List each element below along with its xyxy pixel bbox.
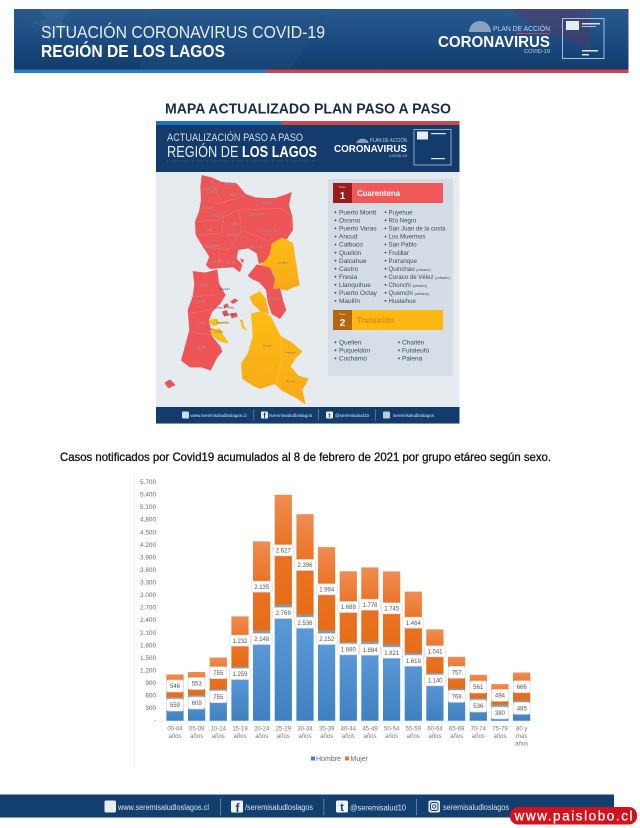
x axis labels: 80 y (516, 726, 527, 732)
commune labels: Frutillar (231, 222, 240, 226)
commune labels: la Costa (207, 189, 217, 193)
y axis labels: 3.300 (140, 580, 156, 586)
link: instagram: seremisaludloslagos (443, 803, 509, 812)
commune labels: Puqueldón (216, 320, 229, 324)
commune labels: San Juan de (204, 186, 220, 190)
x axis labels: 30-34 (297, 726, 313, 732)
commune labels: Castro (197, 321, 205, 325)
bar: 65-69 (448, 657, 465, 721)
x axis labels: años (407, 734, 420, 740)
link: website (104, 800, 209, 812)
y axis labels: 600 (145, 693, 156, 700)
list: communes in quarantine, left column (335, 210, 378, 305)
panel footer: social links: t (328, 412, 331, 420)
bar: 75-79 (491, 684, 508, 721)
commune labels: Quinchao (223, 312, 235, 316)
commune labels: Puerto Varas (262, 228, 278, 232)
x axis labels: 15-19 (232, 726, 248, 732)
commune labels: Chaitén (263, 344, 272, 348)
commune labels: Osorno (230, 192, 239, 196)
bar: 65-69: 757 (452, 670, 462, 676)
x axis labels: más (516, 734, 527, 740)
x axis labels: años (472, 734, 485, 740)
list: communes in transition: Cochamó (339, 356, 367, 363)
x axis labels: años (212, 734, 225, 740)
list: communes in quarantine, left column: Llanquihue (339, 282, 371, 289)
commune labels: Llanquihue (227, 232, 240, 236)
list: communes in quarantine, left column: Puerto Octay (339, 290, 378, 297)
heading: mapa actualizado: MAPA ACTUALIZADO PLAN PASO A PASO (165, 100, 451, 118)
y axis labels: 4.200 (140, 542, 156, 549)
y axis labels: 4.500 (140, 529, 156, 536)
bar: 80 y mas (513, 672, 530, 721)
x axis labels: años (190, 734, 203, 740)
x axis labels: años (255, 734, 268, 740)
step 1 badge: cuarentena: Paso (339, 185, 346, 189)
x axis labels (167, 726, 528, 748)
bar: 05-09: 609 (192, 701, 202, 707)
Hualaihue zone in quarantine (248, 264, 286, 319)
list: communes in transition: Chaitén (402, 340, 425, 346)
bar: 20-24 (251, 541, 272, 721)
x axis labels: 35-39 (319, 726, 335, 732)
north zone in quarantine (195, 175, 293, 272)
commune labels: Dalcahue (194, 299, 206, 303)
link: facebook: /seremisaludloslagos (245, 803, 313, 812)
list: communes in quarantine, right column: San Juan de la costa (388, 226, 446, 233)
list: communes in quarantine, left column: Maullín (339, 298, 360, 305)
link: twitter handle (336, 800, 407, 814)
icon: ministry emblem (562, 18, 604, 58)
panel footer: social links: f (263, 413, 266, 420)
bar: 70-74: 536 (473, 704, 484, 710)
bar: 75-79: 380 (495, 711, 506, 717)
list: communes in quarantine, left column: Calbuco (339, 242, 363, 249)
commune labels: Quemchi (219, 287, 230, 291)
commune labels: Palena (287, 380, 295, 384)
y axis labels: 2.100 (140, 630, 156, 637)
commune labels: Purranque (211, 214, 224, 218)
link: instagram (428, 800, 509, 812)
x axis labels: 70-74 (471, 726, 487, 732)
map of Los Lagos region (164, 175, 309, 404)
panel footer: social links (156, 407, 460, 424)
x axis labels: 60-64 (427, 726, 443, 732)
list: communes in quarantine, right column (385, 210, 450, 305)
bar: 70-74: 561 (473, 685, 484, 691)
bar: 00-04: 546 (170, 684, 181, 690)
commune labels: Fresia (206, 228, 214, 232)
bar: 00-04: 559 (170, 703, 181, 709)
header title (41, 21, 325, 61)
x axis labels: años (515, 742, 528, 748)
bar: 45-49: 1.778 (362, 603, 378, 609)
header title: SITUACIÓN CORONAVIRUS COVID-19 (41, 21, 325, 42)
list: communes in quarantine, right column: Hualaihue (388, 298, 417, 305)
bar: 10-14: 755 (213, 671, 224, 677)
header logo: plan de accion coronavirus: COVID-19 (524, 49, 550, 55)
y axis labels: 5.700 (140, 479, 156, 486)
header logo: plan de accion coronavirus (438, 21, 550, 55)
list: communes in transition: Puqueldón (339, 348, 370, 354)
commune labels: Quellón (196, 345, 206, 349)
x axis labels: años (363, 734, 377, 740)
y axis labels: 3.000 (140, 592, 156, 599)
bar: 15-19: 1.259 (232, 672, 248, 678)
bar: 60-64: 1.041 (427, 650, 443, 656)
bar: 15-19: 1.232 (232, 639, 248, 645)
list: communes in quarantine, left column: Dalcahue (339, 258, 367, 265)
legend (311, 756, 369, 763)
bar: 35-39: 2.152 (319, 637, 335, 643)
header logo: plan de accion coronavirus: PLAN DE ACCIÓN (493, 24, 550, 33)
x axis labels: 10-14 (211, 726, 227, 732)
y axis labels: 5.400 (140, 492, 156, 499)
panel header: ACTUALIZACIÓN PASO A PASO (167, 131, 303, 144)
step 2 badge: transicion: 2 (340, 318, 346, 329)
y axis labels: 1.200 (140, 668, 156, 674)
panel header: PLAN DE ACCIÓN (370, 137, 407, 144)
list: communes in quarantine, right column: Frutillar (388, 250, 409, 257)
legend panel (328, 179, 453, 376)
link: twitter handle: t (340, 802, 344, 814)
bar: 40-44: 1.688 (341, 605, 356, 611)
x axis labels: 20-24 (254, 726, 270, 732)
x axis labels: 05-09 (189, 726, 205, 732)
bar: 25-29: 2.769 (276, 611, 291, 617)
step 1 badge: cuarentena (333, 183, 443, 203)
page header banner (14, 9, 628, 73)
bar: 25-29 (273, 495, 294, 721)
step 1 badge: cuarentena: 1 (340, 191, 346, 202)
commune labels: Maullín (213, 260, 222, 264)
commune labels (194, 181, 296, 384)
bar: 55-59: 1.619 (406, 659, 421, 665)
watermark: paislobo: www.paislobo.cl (514, 808, 632, 824)
header title: REGIÓN DE LOS LAGOS (41, 40, 225, 61)
commune labels: Calbuco (226, 261, 236, 265)
list: communes in quarantine, left column: Castro (339, 266, 359, 273)
bar: 15-19 (230, 616, 250, 721)
bar: 40-44 (338, 571, 359, 721)
step 2 badge: transicion (333, 310, 443, 330)
bar: 00-04 (166, 674, 184, 721)
bar: 10-14 (210, 658, 227, 721)
list: communes in quarantine, left column: Puerto Montt (339, 210, 376, 216)
commune labels: Cochamó (277, 260, 289, 264)
list: communes in transition: Futaleufú (402, 348, 429, 354)
y axis labels: 300 (145, 705, 156, 712)
bar: 65-69: 768 (452, 694, 462, 700)
panel header (156, 121, 460, 172)
list: communes in quarantine, right column: Río Negro (388, 218, 417, 225)
x axis labels: años (168, 734, 182, 740)
list: communes in quarantine, right column: San Pablo (388, 242, 417, 249)
commune labels: Río Negro (201, 206, 214, 210)
x axis labels: años (450, 734, 463, 740)
x axis labels: 50-54 (384, 726, 400, 732)
x axis labels: 25-29 (276, 726, 292, 732)
x axis labels: años (298, 734, 312, 740)
Chiloe island (164, 258, 244, 388)
bar: 80 y mas: 485 (517, 706, 527, 712)
chart: stacked bars by age group and sex (134, 474, 541, 768)
x axis labels: 55-59 (406, 726, 422, 732)
list: communes in quarantine, left column: Osorno (339, 218, 361, 225)
commune labels: Curaco de Vélez (215, 305, 235, 309)
panel header: COVID-19 (389, 154, 407, 158)
y axis labels: 900 (145, 680, 156, 687)
bar: 70-74 (470, 675, 487, 721)
commune labels: Ancud (200, 283, 208, 287)
bar: 50-54 (381, 571, 402, 721)
bar: 20-24: 2.135 (254, 585, 270, 591)
x axis labels: 00-04 (167, 726, 183, 732)
x axis labels: años (277, 734, 290, 740)
bar: 55-59 (403, 592, 424, 721)
bar: 30-34: 2.536 (297, 621, 313, 627)
step 2 badge: transicion: Paso (339, 312, 346, 316)
list: communes in quarantine, right column: Quinchao (urbano) (388, 266, 431, 273)
commune labels: Quellen (214, 329, 223, 333)
page footer: social links (0, 794, 614, 818)
list: communes in quarantine, right column: Puyehue (388, 210, 413, 216)
y axis labels: 5.100 (140, 504, 156, 511)
list: communes in quarantine, right column: Curaco de Vélez (urbano) (388, 274, 450, 281)
step 1 badge: cuarentena: Cuarentena (357, 188, 400, 198)
bar: 30-34 (294, 514, 316, 721)
commune labels: Hualaihue (268, 296, 280, 300)
bar: 35-39 (316, 547, 337, 721)
y axis labels: - (154, 718, 156, 725)
bar: 60-64 (424, 629, 446, 721)
link: website: www.seremisaludloslagos.cl (117, 803, 209, 812)
bar: 50-54: 1.745 (384, 606, 400, 612)
south zone in transition (240, 291, 309, 404)
panel header: REGIÓN DE LOS LAGOS (167, 142, 317, 161)
x axis labels: años (342, 734, 355, 740)
commune labels: Futaleufú (285, 351, 296, 355)
panel header: CORONAVIRUS (334, 143, 407, 155)
commune labels: Puerto Montt (247, 244, 262, 248)
list: communes in quarantine, left column: Ancud (339, 234, 358, 241)
list: communes in quarantine, right column: Chonchi (urbano) (388, 282, 428, 289)
y axis labels: 1.500 (140, 655, 156, 662)
x axis labels: 75-79 (492, 726, 508, 732)
x axis labels: años (233, 734, 247, 740)
y axis labels: 4.800 (140, 517, 156, 524)
header logo: plan de accion coronavirus: CORONAVIRUS (438, 34, 550, 51)
x axis labels: años (428, 734, 442, 740)
Cochamo zone in transition (258, 238, 300, 291)
list: communes in quarantine, right column: Purranque (388, 258, 418, 265)
bar: 10-14: 755 (213, 695, 224, 701)
bar: 55-59: 1.464 (406, 621, 421, 627)
bar: 60-64: 1.140 (427, 678, 443, 684)
bar: 45-49 (360, 567, 380, 721)
bar: 40-44: 1.880 (341, 648, 356, 654)
link: facebook: f (236, 801, 240, 815)
heading: casos notificados: Casos notificados por Covid19 acumulados al 8 de febrero de 2021 por grupo etáreo según sexo. (60, 450, 551, 464)
commune labels: Puerto Octay (248, 212, 264, 216)
list: communes in quarantine, right column: Quemchi (urbano) (388, 290, 430, 297)
list: communes in quarantine, left column: Quellón (339, 250, 362, 257)
legend: Mujer (350, 756, 369, 763)
list: communes in quarantine, left column: Puerto Varas (339, 226, 377, 233)
bar: 30-34: 2.396 (297, 563, 313, 569)
step 2 badge: transicion: Transición (357, 315, 394, 325)
list: communes in transition (335, 340, 429, 363)
panel footer: social links: seremisaludloslagos (393, 413, 435, 419)
commune labels: Puyehue (261, 201, 272, 205)
link: twitter handle: @seremisalud10 (350, 804, 407, 812)
bar: 20-24: 2.148 (254, 637, 270, 643)
list: communes in quarantine, right column: Los Muermos (388, 234, 425, 241)
x axis labels: 65-69 (449, 726, 465, 732)
bar: 05-09: 553 (192, 682, 202, 688)
panel: mapa paso a paso (156, 121, 460, 424)
panel footer: social links: www.seremisaludloslagos.cl (190, 413, 246, 419)
commune labels: Los Muermos (204, 244, 221, 248)
commune labels: San Pablo (224, 181, 237, 185)
x axis labels: 45-49 (362, 726, 378, 732)
link: facebook (231, 800, 313, 815)
y axis labels: 1.800 (140, 642, 156, 649)
list: communes in transition: Palena (402, 356, 423, 363)
x axis labels: años (385, 734, 398, 740)
panel footer: social links: /seremisaludloslagos (269, 413, 313, 419)
x axis labels: años (320, 734, 333, 740)
x axis labels: años (493, 734, 507, 740)
panel footer: social links: @seremisalud10 (335, 413, 369, 419)
y axis labels: 2.400 (140, 617, 156, 624)
list: communes in transition: Quellen (339, 340, 362, 346)
y axis labels: 3.900 (140, 554, 156, 561)
y axis labels: 3.600 (140, 567, 156, 574)
y axis labels (140, 479, 156, 725)
bar: 25-29: 2.627 (276, 548, 291, 554)
list: communes in quarantine, left column: Fresia (339, 274, 357, 281)
bar: 45-49: 1.884 (362, 648, 378, 654)
x axis labels: 40-44 (341, 726, 357, 732)
bar: 05-09 (188, 672, 205, 721)
bar: 75-79: 494 (495, 694, 506, 700)
bar: 50-54: 1.821 (384, 651, 400, 657)
legend: Hombre (316, 756, 341, 763)
bar: 80 y mas: 666 (517, 685, 527, 691)
bar: 35-39: 1.994 (319, 588, 335, 594)
y axis labels: 2.700 (140, 605, 156, 612)
